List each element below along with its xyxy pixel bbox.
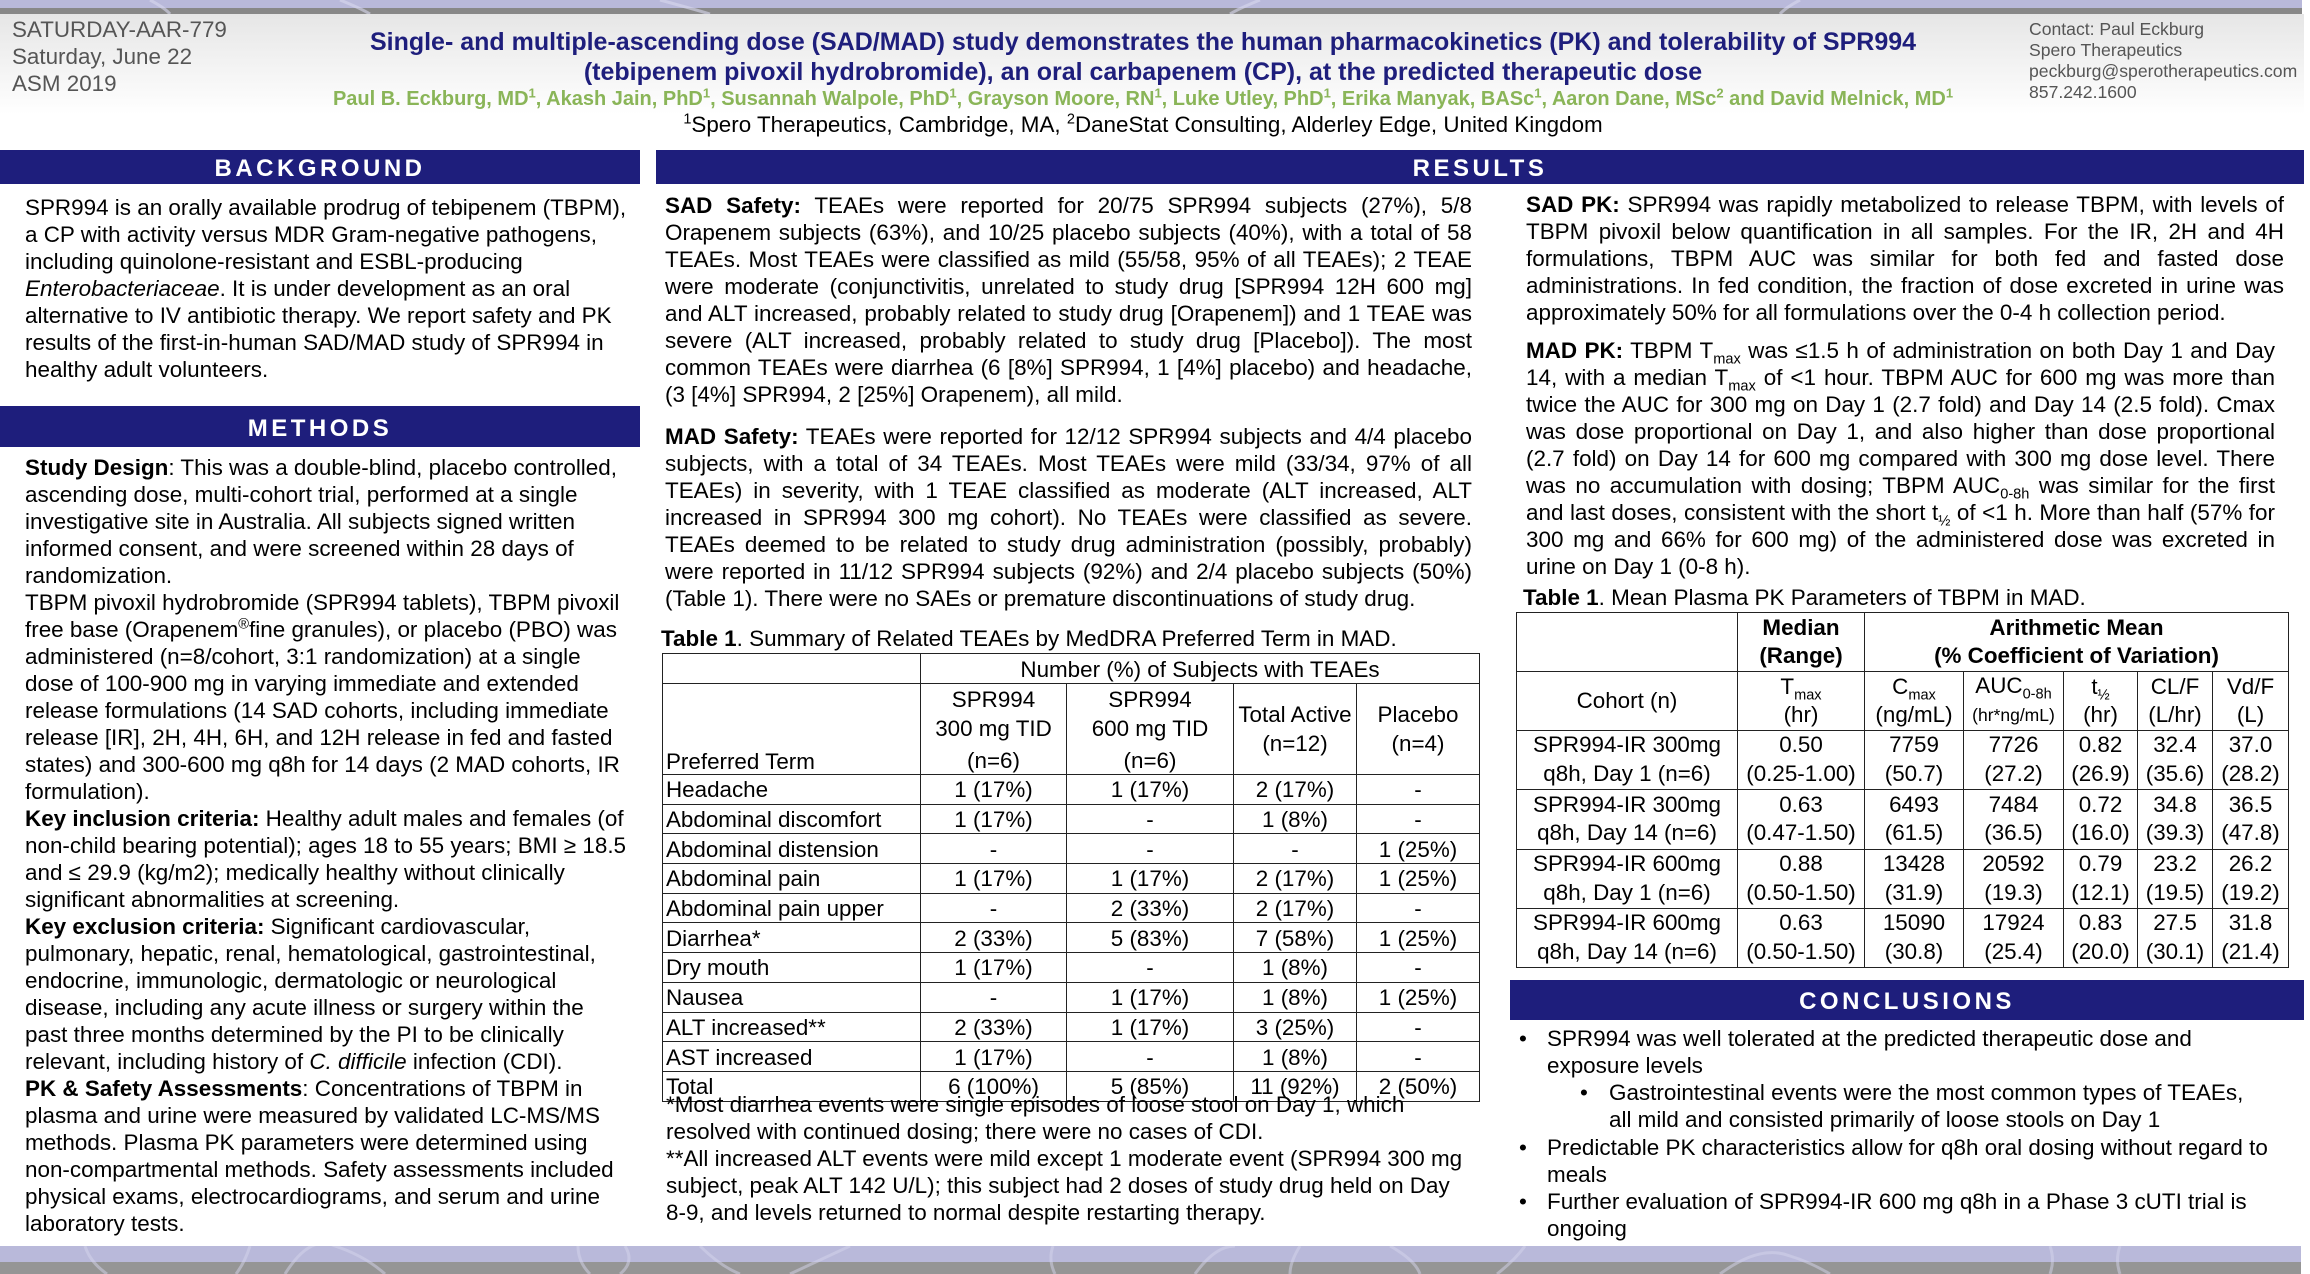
conclusion 1 sub-bullet: Gastrointestinal events were the most common types of TEAEs, bbox=[1609, 1080, 2243, 1105]
table: PK parameters: 7726 bbox=[1989, 732, 2038, 757]
table: PK parameters: (19.3) bbox=[1984, 880, 2043, 905]
text: background: SPR994 is an orally available prodrug of tebipenem (TBPM), bbox=[25, 195, 626, 220]
table: TEAEs by preferred term: 2 (17%) bbox=[1256, 777, 1334, 802]
text: methods: randomization. bbox=[25, 563, 172, 588]
table: PK parameters: 0.83 bbox=[2079, 910, 2122, 935]
heading: methods bbox=[0, 406, 640, 447]
table: TEAEs by preferred term: Placebo bbox=[1378, 702, 1458, 726]
table: TEAEs by preferred term: Total Active bbox=[1238, 702, 1352, 726]
table: PK parameters: (L/hr) bbox=[2148, 702, 2202, 727]
table: TEAEs by preferred term: 1 (25%) bbox=[1379, 926, 1457, 951]
table: TEAEs by preferred term: - bbox=[990, 837, 997, 862]
text: methods: plasma and urine were measured by validated LC-MS/MS bbox=[25, 1103, 600, 1128]
session info: SATURDAY-AAR-779 bbox=[12, 17, 227, 42]
heading: methods: METHODS bbox=[248, 414, 392, 442]
text: SAD safety bbox=[665, 193, 1472, 407]
affiliations: 1Spero Therapeutics, Cambridge, MA, 2DaneStat Consulting, Alderley Edge, United Kingdom bbox=[683, 112, 1603, 137]
session info bbox=[12, 17, 227, 96]
table: TEAEs by preferred term: Nausea bbox=[666, 985, 743, 1010]
text: SAD PK: administrations. In fed condition, the fraction of dose excreted in urine was bbox=[1526, 273, 2284, 298]
table: TEAEs by preferred term: 1 (17%) bbox=[1111, 777, 1189, 802]
text: background: healthy adult volunteers. bbox=[25, 357, 268, 382]
text: background bbox=[25, 195, 626, 382]
text: methods: non-compartmental methods. Safety assessments included bbox=[25, 1157, 614, 1182]
table: PK parameters: q8h, Day 14 (n=6) bbox=[1537, 939, 1717, 964]
table: PK parameters: Median bbox=[1762, 615, 1840, 640]
text: methods: physical exams, electrocardiograms, and serum and urine bbox=[25, 1184, 600, 1209]
table: TEAEs by preferred term: 2 (17%) bbox=[1256, 866, 1334, 891]
table: PK parameters: 20592 bbox=[1982, 851, 2045, 876]
footnotes: table 1: *Most diarrhea events were single episodes of loose stool on Day 1, which bbox=[666, 1092, 1404, 1117]
table: PK parameters: (hr) bbox=[2083, 702, 2118, 727]
text: SAD PK bbox=[1526, 192, 2284, 325]
table: TEAEs by preferred term: (n=6) bbox=[1124, 748, 1176, 773]
text: methods: relevant, including history of C. difficile infection (CDI). bbox=[25, 1049, 562, 1074]
text: SAD PK: SAD PK: SPR994 was rapidly metabolized to release TBPM, with levels of bbox=[1526, 192, 2284, 217]
table: PK parameters: (61.5) bbox=[1885, 820, 1943, 845]
text: methods: endocrine, immunologic, dermatologic or neurological bbox=[25, 968, 556, 993]
table: TEAEs by preferred term: 1 (25%) bbox=[1379, 985, 1457, 1010]
title bbox=[370, 28, 1916, 86]
table: TEAEs by preferred term: Abdominal discomfort bbox=[666, 807, 881, 832]
table: PK parameters: q8h, Day 1 (n=6) bbox=[1543, 880, 1711, 905]
table: TEAEs by preferred term: Total bbox=[666, 1074, 713, 1099]
text: methods bbox=[25, 455, 626, 1236]
conclusion 1 bbox=[1519, 1026, 2192, 1078]
table: TEAEs by preferred term: - bbox=[1146, 1045, 1154, 1070]
table: TEAEs by preferred term: - bbox=[1414, 1045, 1422, 1070]
text: MAD PK: (2.7 fold) on Day 14 for 600 mg compared with 300 mg dose level. There bbox=[1526, 446, 2275, 471]
table: PK parameters: 0.50 bbox=[1779, 732, 1823, 757]
table: PK parameters: (ng/mL) bbox=[1875, 702, 1953, 727]
table: TEAEs by preferred term: 1 (17%) bbox=[1111, 866, 1189, 891]
table: PK parameters: (30.1) bbox=[2146, 939, 2204, 964]
table: TEAEs by preferred term: 2 (33%) bbox=[954, 926, 1033, 951]
text: methods: laboratory tests. bbox=[25, 1211, 185, 1236]
title: (tebipenem pivoxil hydrobromide), an oral carbapenem (CP), at the predicted therapeutic dose bbox=[584, 58, 1702, 86]
table: PK parameters: (31.9) bbox=[1885, 880, 1943, 905]
text: MAD safety: were reported in 11/12 SPR994 subjects (92%) and 2/4 placebo subjects (50%) bbox=[665, 559, 1472, 584]
table: TEAEs by preferred term: - bbox=[1414, 807, 1422, 832]
text: methods: release [IR], 2H, 4H, 6H, and 12H release in fed and fasted bbox=[25, 725, 612, 750]
table: TEAEs by preferred term: 1 (17%) bbox=[954, 866, 1033, 891]
table: PK parameters: (21.4) bbox=[2221, 939, 2280, 964]
text: SAD safety: and ALT increased, probably related to study drug [Orapenem]) and 1 TEAE was bbox=[665, 301, 1472, 326]
footnotes: table 1 bbox=[666, 1092, 1462, 1225]
table: PK parameters: (hr*ng/mL) bbox=[1972, 705, 2055, 725]
text: methods: informed consent, and were screened within 28 days of bbox=[25, 536, 574, 561]
conclusion 3 bbox=[1519, 1188, 2247, 1240]
table: TEAEs by preferred term: Abdominal pain upper bbox=[666, 896, 884, 921]
table: TEAEs by preferred term: 2 (50%) bbox=[1379, 1074, 1457, 1099]
table: PK parameters: Vd/F bbox=[2227, 674, 2274, 698]
table: PK parameters: 0.82 bbox=[2079, 732, 2122, 757]
text: SAD safety: TEAEs. Most TEAEs were classified as mild (55/58, 95% of all TEAEs); 2 TEAE bbox=[665, 247, 1472, 272]
text: methods: Key exclusion criteria: Significant cardiovascular, bbox=[25, 914, 530, 939]
table: TEAEs by preferred term: 1 (8%) bbox=[1262, 985, 1328, 1010]
table: TEAEs by preferred term: - bbox=[1146, 807, 1154, 832]
footnotes: table 1: **All increased ALT events were mild except 1 moderate event (SPR994 300 mg bbox=[666, 1146, 1462, 1171]
table: TEAEs by preferred term: - bbox=[1414, 896, 1422, 921]
text: SAD safety: severe (ALT increased, probably related to study drug [Placebo]). The most bbox=[665, 328, 1472, 353]
table: PK parameters: 36.5 bbox=[2229, 792, 2272, 817]
table: PK parameters: (25.4) bbox=[1984, 939, 2043, 964]
table: PK parameters: Arithmetic Mean bbox=[1989, 615, 2164, 640]
heading: conclusions bbox=[1510, 980, 2304, 1020]
table: TEAEs by preferred term: Headache bbox=[666, 777, 768, 802]
table: TEAEs by preferred term bbox=[662, 653, 1480, 1102]
heading: background: BACKGROUND bbox=[214, 154, 426, 182]
table: PK parameters: SPR994-IR 300mg bbox=[1533, 792, 1721, 817]
table: PK parameters: 0.63 bbox=[1779, 792, 1823, 817]
table: TEAEs by preferred term: 1 (25%) bbox=[1379, 866, 1457, 891]
table: PK parameters: SPR994-IR 600mg bbox=[1533, 851, 1721, 876]
footnotes: table 1: 8-9, and levels returned to normal despite restarting therapy. bbox=[666, 1200, 1266, 1225]
table: PK parameters: t½ bbox=[2091, 674, 2110, 703]
heading: results bbox=[656, 150, 2304, 184]
text: MAD PK: 14, with a median Tmax of <1 hour. TBPM AUC for 600 mg was more than bbox=[1526, 365, 2275, 394]
text: MAD PK: was dose proportional on Day 1, and also higher than dose proportional bbox=[1526, 419, 2275, 444]
table: TEAEs by preferred term: 1 (17%) bbox=[954, 1045, 1033, 1070]
table: TEAEs by preferred term: - bbox=[1291, 837, 1299, 862]
table: PK parameters: (19.2) bbox=[2221, 880, 2280, 905]
table: TEAEs by preferred term: 5 (83%) bbox=[1111, 926, 1189, 951]
heading: results: RESULTS bbox=[1413, 154, 1547, 182]
session info: ASM 2019 bbox=[12, 71, 117, 96]
table: PK parameters: 0.88 bbox=[1779, 851, 1823, 876]
table: TEAEs by preferred term: 1 (8%) bbox=[1262, 1045, 1328, 1070]
table: TEAEs by preferred term: 1 (17%) bbox=[954, 807, 1033, 832]
table: PK parameters: (L) bbox=[2237, 702, 2264, 727]
table: PK parameters: (39.3) bbox=[2146, 820, 2204, 845]
text: methods: past three months determined by the PI to be clinically bbox=[25, 1022, 564, 1047]
table: TEAEs by preferred term: 6 (100%) bbox=[948, 1074, 1039, 1099]
table: TEAEs by preferred term: 1 (25%) bbox=[1379, 837, 1457, 862]
text: MAD PK: urine on Day 1 (0-8 h). bbox=[1526, 554, 1750, 579]
text: SAD PK: formulations, TBPM AUC was similar for both fed and fasted dose bbox=[1526, 246, 2284, 271]
text: background: Enterobacteriaceae. It is under development as an oral bbox=[25, 276, 570, 301]
table: TEAEs by preferred term: ALT increased** bbox=[666, 1015, 826, 1040]
table: TEAEs by preferred term: - bbox=[990, 985, 997, 1010]
table: PK parameters: 32.4 bbox=[2153, 732, 2197, 757]
conclusion 3: Further evaluation of SPR994-IR 600 mg q8h in a Phase 3 cUTI trial is bbox=[1547, 1188, 2247, 1214]
table: PK parameters: CL/F bbox=[2151, 674, 2199, 698]
table: PK parameters: 17924 bbox=[1982, 910, 2045, 935]
session info: Saturday, June 22 bbox=[12, 44, 192, 69]
text: MAD safety bbox=[665, 424, 1472, 611]
table: PK parameters: 6493 bbox=[1889, 792, 1939, 817]
table: TEAEs by preferred term: 3 (25%) bbox=[1256, 1015, 1334, 1040]
header gradient bbox=[0, 14, 2304, 114]
text: MAD PK: and last doses, consistent with the short t½ of <1 h. More than half (57% for bbox=[1526, 500, 2275, 529]
text: SAD safety: Orapenem subjects (63%), and 10/25 placebo subjects (40%), with a total of 58 bbox=[665, 220, 1472, 245]
text: MAD safety: MAD Safety: TEAEs were reported for 12/12 SPR994 subjects and 4/4 placebo bbox=[665, 424, 1472, 449]
table: PK parameters: (16.0) bbox=[2071, 820, 2130, 845]
table: PK parameters: (0.50-1.50) bbox=[1746, 939, 1856, 964]
contact: Spero Therapeutics bbox=[2029, 40, 2182, 60]
text: background: results of the first-in-human SAD/MAD study of SPR994 in bbox=[25, 330, 604, 355]
heading: background bbox=[0, 150, 640, 184]
text: methods: non-child bearing potential); ages 18 to 55 years; BMI ≥ 18.5 bbox=[25, 833, 626, 858]
authors: Paul B. Eckburg, MD1, Akash Jain, PhD1, Susannah Walpole, PhD1, Grayson Moore, RN1, Luke Utley, PhD1, Erika Manyak, BASc1, Aaron Dane, MSc2 and David Melnick, MD1 bbox=[333, 85, 1953, 110]
table: PK parameters bbox=[1516, 612, 2289, 968]
text: background: a CP with activity versus MDR Gram-negative pathogens, bbox=[25, 222, 597, 247]
text: MAD PK bbox=[1526, 338, 2275, 579]
table: TEAEs by preferred term: - bbox=[990, 896, 997, 921]
text: MAD PK: was no accumulation with dosing; TBPM AUC0-8h was similar for the first bbox=[1526, 473, 2275, 502]
conclusion 1 sub-bullet: • bbox=[1580, 1080, 1588, 1105]
table: PK parameters: SPR994-IR 300mg bbox=[1533, 732, 1721, 757]
table: TEAEs by preferred term: 1 (8%) bbox=[1262, 807, 1328, 832]
conclusion 1 sub-bullet bbox=[1580, 1080, 2243, 1132]
conclusion 1 sub-bullet: all mild and consisted primarily of loose stools on Day 1 bbox=[1609, 1107, 2160, 1132]
table: TEAEs by preferred term: 2 (33%) bbox=[1111, 896, 1189, 921]
table: PK parameters: (0.47-1.50) bbox=[1746, 820, 1856, 845]
text: methods: and ≤ 29.9 (kg/m2); medically healthy without clinically bbox=[25, 860, 565, 885]
table: TEAEs by preferred term: AST increased bbox=[666, 1045, 812, 1070]
table: TEAEs by preferred term: - bbox=[1414, 955, 1422, 980]
table: PK parameters: (27.2) bbox=[1984, 761, 2043, 786]
text: methods: formulation). bbox=[25, 779, 150, 804]
text: MAD safety: TEAEs deemed to be related to study drug administration (possibly, probably) bbox=[665, 532, 1472, 557]
conclusion 2 bbox=[1519, 1134, 2268, 1186]
text: SAD safety: SAD Safety: TEAEs were reported for 20/75 SPR994 subjects (27%), 5/8 bbox=[665, 193, 1472, 218]
table: PK parameters: q8h, Day 14 (n=6) bbox=[1537, 820, 1717, 845]
contact bbox=[2029, 19, 2297, 102]
footnotes: table 1: resolved with continued dosing; there were no cases of CDI. bbox=[666, 1119, 1263, 1144]
table: PK parameters: Cmax bbox=[1892, 674, 1936, 703]
text: MAD safety: subjects, with a total of 34 TEAEs. Most TEAEs were mild (33/34, 97% of all bbox=[665, 451, 1472, 476]
table: PK parameters: (36.5) bbox=[1984, 820, 2043, 845]
table: TEAEs by preferred term: Preferred Term bbox=[666, 748, 815, 774]
table: TEAEs by preferred term: 2 (33%) bbox=[954, 1015, 1033, 1040]
table: PK parameters: AUC0-8h bbox=[1975, 673, 2052, 702]
text: MAD safety: (Table 1). There were no SAEs or premature discontinuations of study drug. bbox=[665, 586, 1415, 611]
text: MAD PK: MAD PK: TBPM Tmax was ≤1.5 h of administration on both Day 1 and Day bbox=[1526, 338, 2275, 367]
table: PK parameters: (30.8) bbox=[1885, 939, 1943, 964]
table: TEAEs by preferred term: Number (%) of Subjects with TEAEs bbox=[1020, 656, 1380, 682]
top decorative band bbox=[0, 0, 2302, 14]
table: PK parameters: q8h, Day 1 (n=6) bbox=[1543, 761, 1711, 786]
table: TEAEs by preferred term: Diarrhea* bbox=[666, 926, 761, 951]
table: TEAEs by preferred term: - bbox=[1146, 955, 1154, 980]
table: TEAEs by preferred term: 300 mg TID bbox=[935, 716, 1052, 741]
conclusion 3: ongoing bbox=[1547, 1216, 1627, 1240]
table: PK parameters: (28.2) bbox=[2221, 761, 2280, 786]
table: TEAEs by preferred term: 1 (8%) bbox=[1262, 955, 1328, 980]
text: MAD PK: twice the AUC for 300 mg on Day 1 (2.7 fold) and Day 14 (2.5 fold). Cmax bbox=[1526, 392, 2275, 417]
text: methods: release formulations (14 SAD cohorts, including immediate bbox=[25, 698, 609, 723]
table: TEAEs by preferred term: SPR994 bbox=[1108, 687, 1192, 712]
text: methods: administered (n=8/cohort, 3:1 randomization) at a single bbox=[25, 644, 581, 669]
conclusion 2: meals bbox=[1547, 1162, 1607, 1186]
table: TEAEs by preferred term: 5 (85%) bbox=[1111, 1074, 1189, 1099]
table: TEAEs by preferred term: 1 (17%) bbox=[954, 955, 1033, 980]
text: methods: TBPM pivoxil hydrobromide (SPR994 tablets), TBPM pivoxil bbox=[25, 590, 619, 615]
table: PK parameters: 15090 bbox=[1883, 910, 1945, 935]
table: TEAEs by preferred term: 600 mg TID bbox=[1092, 716, 1208, 741]
table: PK parameters: (35.6) bbox=[2146, 761, 2204, 786]
table: PK parameters: (19.5) bbox=[2146, 880, 2204, 905]
table: PK parameters: 0.63 bbox=[1779, 910, 1823, 935]
text: methods: dose of 100-900 mg in varying immediate and extended bbox=[25, 671, 579, 696]
table: PK parameters: 0.79 bbox=[2079, 851, 2122, 876]
text: SAD PK: TBPM pivoxil below quantification in all samples. For the IR, 2H and 4H bbox=[1526, 219, 2284, 244]
table: PK parameters: 27.5 bbox=[2153, 910, 2197, 935]
contact: Contact: Paul Eckburg bbox=[2029, 19, 2204, 39]
text: SAD safety: were moderate (conjunctivitis, unrelated to study drug [SPR994 12H 600 mg] bbox=[665, 274, 1472, 299]
table: PK parameters: (Range) bbox=[1759, 643, 1843, 668]
text: methods: PK & Safety Assessments: Concentrations of TBPM in bbox=[25, 1076, 582, 1101]
table: PK parameters: Tmax bbox=[1780, 674, 1822, 703]
bottom decorative band bbox=[0, 1246, 2301, 1274]
text: MAD safety: increased in SPR994 300 mg cohort). No TEAEs were classified as severe. bbox=[665, 505, 1472, 530]
footnotes: table 1: subject, peak ALT 142 U/L); this subject had 2 doses of study drug held on Day bbox=[666, 1173, 1450, 1198]
table: PK parameters: 37.0 bbox=[2229, 732, 2272, 757]
text: background: alternative to IV antibiotic therapy. We report safety and PK bbox=[25, 303, 612, 328]
table: TEAEs by preferred term: Abdominal distension bbox=[666, 837, 879, 862]
text: SAD safety: (3 [4%] SPR994, 2 [25%] Orapenem), all mild. bbox=[665, 382, 1123, 407]
text: methods: ascending dose, multi-cohort trial, performed at a single bbox=[25, 482, 578, 507]
table: PK parameters: (20.0) bbox=[2071, 939, 2130, 964]
table: TEAEs by preferred term: SPR994 bbox=[952, 687, 1035, 712]
text: methods: methods. Plasma PK parameters were determined using bbox=[25, 1130, 587, 1155]
caption: table 1 PK: Table 1. Mean Plasma PK Parameters of TBPM in MAD. bbox=[1523, 585, 2086, 610]
contact: 857.242.1600 bbox=[2029, 82, 2137, 102]
table: PK parameters: 23.2 bbox=[2153, 851, 2197, 876]
table: TEAEs by preferred term: 7 (58%) bbox=[1256, 926, 1334, 951]
table: PK parameters: 7484 bbox=[1989, 792, 2038, 817]
table: TEAEs by preferred term: 2 (17%) bbox=[1256, 896, 1334, 921]
conclusion 1: • bbox=[1519, 1026, 1527, 1051]
table: PK parameters: 13428 bbox=[1883, 851, 1945, 876]
table: TEAEs by preferred term: (n=12) bbox=[1262, 731, 1328, 756]
table: PK parameters: (47.8) bbox=[2221, 820, 2280, 845]
text: methods: disease, including any acute illness or surgery within the bbox=[25, 995, 584, 1020]
table: TEAEs by preferred term: 1 (17%) bbox=[954, 777, 1033, 802]
caption: table 1 TEAEs: Table 1. Summary of Related TEAEs by MedDRA Preferred Term in MAD. bbox=[661, 626, 1397, 651]
text: methods: free base (Orapenem®fine granules), or placebo (PBO) was bbox=[25, 617, 617, 642]
text: methods: states) and 300-600 mg q8h for 14 days (2 MAD cohorts, IR bbox=[25, 752, 620, 777]
table: TEAEs by preferred term: - bbox=[1146, 837, 1154, 862]
text: methods: pulmonary, hepatic, renal, hematological, gastrointestinal, bbox=[25, 941, 596, 966]
table: PK parameters: (hr) bbox=[1784, 702, 1818, 727]
conclusion 2: Predictable PK characteristics allow for q8h oral dosing without regard to bbox=[1547, 1134, 2268, 1160]
table: PK parameters: Cohort (n) bbox=[1577, 688, 1677, 713]
heading: conclusions: CONCLUSIONS bbox=[1799, 988, 2015, 1014]
text: SAD PK: approximately 50% for all formulations over the 0-4 h collection period. bbox=[1526, 300, 2226, 325]
table: PK parameters: (12.1) bbox=[2071, 880, 2130, 905]
table: TEAEs by preferred term: 1 (17%) bbox=[1111, 985, 1189, 1010]
title: Single- and multiple-ascending dose (SAD/MAD) study demonstrates the human pharmacokinetics (PK) and tolerability of SPR994 bbox=[370, 28, 1916, 56]
table: TEAEs by preferred term: (n=4) bbox=[1392, 731, 1444, 756]
table: PK parameters: 31.8 bbox=[2229, 910, 2272, 935]
table: TEAEs by preferred term: 11 (92%) bbox=[1250, 1074, 1340, 1099]
table: PK parameters: (26.9) bbox=[2071, 761, 2130, 786]
table: TEAEs by preferred term: - bbox=[1414, 1015, 1422, 1040]
table: PK parameters: (50.7) bbox=[1885, 761, 1943, 786]
text: methods: significant abnormalities at screening. bbox=[25, 887, 399, 912]
text: methods: Study Design: This was a double-blind, placebo controlled, bbox=[25, 455, 617, 480]
conclusion 3: • bbox=[1519, 1188, 1527, 1214]
table: PK parameters: 7759 bbox=[1889, 732, 1939, 757]
text: MAD safety: TEAEs) in severity, with 1 TEAE classified as moderate (ALT increased, ALT bbox=[665, 478, 1472, 503]
conclusion 1: SPR994 was well tolerated at the predicted therapeutic dose and bbox=[1547, 1026, 2192, 1051]
text: methods: Key inclusion criteria: Healthy adult males and females (of bbox=[25, 806, 624, 831]
table: PK parameters: (0.25-1.00) bbox=[1746, 761, 1856, 786]
table: PK parameters: (0.50-1.50) bbox=[1746, 880, 1856, 905]
table: PK parameters: SPR994-IR 600mg bbox=[1533, 910, 1721, 935]
table: TEAEs by preferred term: (n=6) bbox=[967, 748, 1020, 773]
conclusion 1: exposure levels bbox=[1547, 1053, 1703, 1078]
contact: peckburg@sperotherapeutics.com bbox=[2029, 61, 2297, 81]
table: TEAEs by preferred term: - bbox=[1414, 777, 1422, 802]
table: PK parameters: 0.72 bbox=[2079, 792, 2122, 817]
table: TEAEs by preferred term: Dry mouth bbox=[666, 955, 769, 980]
list: conclusions bbox=[1519, 1026, 2268, 1240]
table: TEAEs by preferred term: 1 (17%) bbox=[1111, 1015, 1189, 1040]
table: PK parameters: (% Coefficient of Variation) bbox=[1934, 643, 2219, 668]
conclusion 2: • bbox=[1519, 1134, 1527, 1160]
text: MAD PK: 300 mg and 66% for 600 mg) of the administered dose was excreted in bbox=[1526, 527, 2275, 552]
table: PK parameters: 34.8 bbox=[2153, 792, 2197, 817]
text: methods: investigative site in Australia. All subjects signed written bbox=[25, 509, 575, 534]
text: background: including quinolone-resistant and ESBL-producing bbox=[25, 249, 523, 274]
table: TEAEs by preferred term: Abdominal pain bbox=[666, 866, 820, 891]
table: PK parameters: 26.2 bbox=[2229, 851, 2272, 876]
text: SAD safety: common TEAEs were diarrhea (6 [8%] SPR994, 1 [4%] placebo) and headache, bbox=[665, 355, 1472, 380]
